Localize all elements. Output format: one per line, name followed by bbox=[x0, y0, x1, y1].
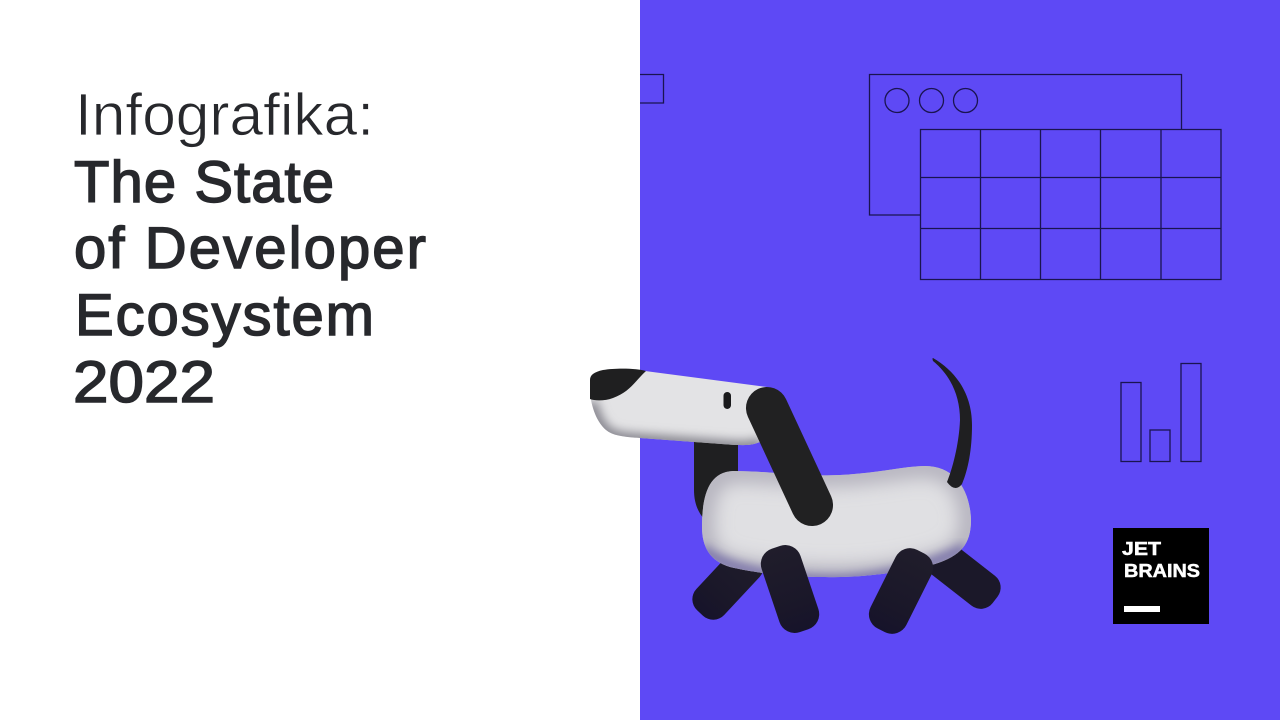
logo text: BRAINS: BRAINS bbox=[1124, 560, 1200, 581]
logo text: JET: JET bbox=[1122, 538, 1162, 559]
dog back left leg bbox=[686, 540, 770, 626]
dog front right leg bbox=[863, 543, 939, 639]
title line: Ecosystem: Ecosystem bbox=[75, 283, 374, 348]
title line: of Developer: of Developer bbox=[74, 216, 426, 281]
logo: JetBrains bbox=[1113, 528, 1209, 624]
icon: browser window outline with table bbox=[870, 74, 1221, 280]
dog body bbox=[702, 466, 971, 578]
browser window frame bbox=[870, 74, 1182, 215]
dog neck bbox=[694, 436, 738, 519]
dog nose bbox=[590, 369, 646, 400]
dog ear bbox=[739, 380, 840, 533]
window control circles bbox=[885, 88, 978, 112]
icon: outlined bar chart bbox=[1121, 364, 1201, 462]
title line: The State: The State bbox=[74, 150, 334, 215]
dog head bbox=[591, 371, 766, 446]
illustration: dog bbox=[585, 358, 1007, 639]
panel: white background bbox=[0, 0, 640, 720]
title line: Infografika: Infografika: bbox=[75, 82, 374, 148]
title bbox=[73, 82, 426, 415]
dog eye bbox=[724, 392, 731, 409]
dog front left leg bbox=[757, 541, 823, 637]
dog head underside shading bbox=[591, 402, 762, 447]
dog body edge shading bbox=[702, 466, 971, 577]
logo bar bbox=[1124, 606, 1160, 612]
table grid bbox=[920, 130, 1221, 280]
dog tail bbox=[932, 358, 972, 488]
title line: 2022: 2022 bbox=[73, 350, 215, 415]
dog body underside shading bbox=[702, 548, 965, 580]
dog back right leg bbox=[909, 527, 1007, 615]
icon: small outlined rectangle at panel edge bbox=[640, 74, 664, 103]
panel: purple background bbox=[640, 0, 1280, 720]
